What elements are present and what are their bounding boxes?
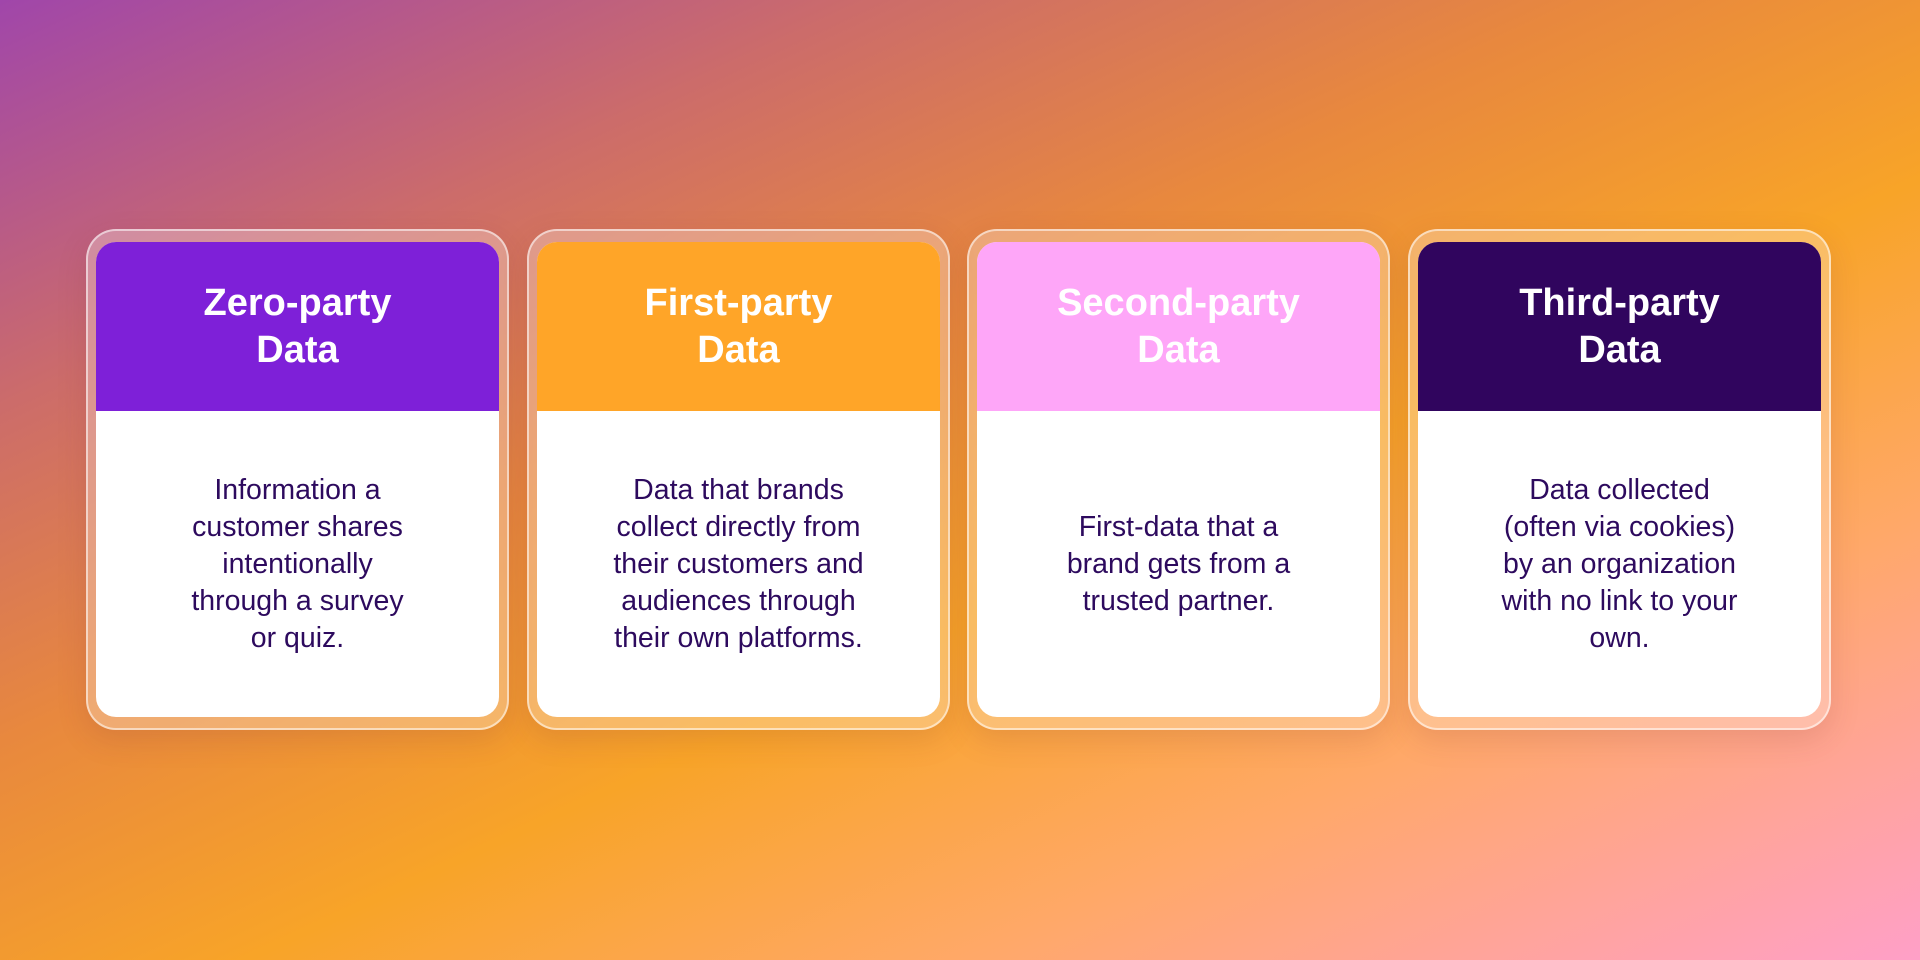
text: third-party description: Data collected bbox=[1529, 474, 1710, 506]
card: zero-party bbox=[86, 229, 509, 730]
text: first-party description: collect directly from bbox=[617, 510, 860, 542]
text: second-party description: trusted partner. bbox=[1083, 584, 1274, 616]
heading: first-party: First-party bbox=[645, 282, 832, 324]
text: zero-party description: or quiz. bbox=[251, 622, 344, 654]
text: first-party description bbox=[613, 474, 864, 654]
text: zero-party description: intentionally bbox=[222, 548, 373, 580]
heading: third-party: Third-party bbox=[1519, 282, 1720, 324]
heading: second-party: Data bbox=[1137, 328, 1220, 370]
heading: zero-party: Data bbox=[256, 328, 339, 370]
text: second-party description: brand gets from a bbox=[1067, 548, 1290, 580]
text: first-party description: their customers and bbox=[613, 548, 864, 580]
text: first-party description: audiences through bbox=[621, 584, 856, 616]
text: zero-party description bbox=[191, 474, 404, 654]
card: first-party bbox=[527, 229, 950, 730]
card: third-party bbox=[1408, 229, 1831, 730]
heading: first-party bbox=[537, 242, 940, 411]
text: third-party description bbox=[1501, 474, 1738, 654]
text: third-party description: (often via cookies) bbox=[1504, 510, 1735, 542]
heading: second-party: Second-party bbox=[1057, 282, 1300, 324]
text: first-party description: Data that brands bbox=[633, 474, 844, 506]
text: third-party description: with no link to your bbox=[1501, 584, 1738, 616]
card: second-party bbox=[967, 229, 1390, 730]
text: first-party description: their own platforms. bbox=[614, 622, 863, 654]
heading: zero-party: Zero-party bbox=[204, 282, 391, 324]
text: zero-party description: Information a bbox=[214, 474, 381, 506]
text: second-party description bbox=[1067, 510, 1290, 616]
text: second-party description: First-data that a bbox=[1079, 510, 1278, 542]
text: zero-party description: through a survey bbox=[191, 584, 404, 616]
heading: third-party: Data bbox=[1578, 328, 1661, 370]
heading: first-party: Data bbox=[697, 328, 780, 370]
heading: zero-party bbox=[96, 242, 499, 411]
heading: third-party bbox=[1418, 242, 1821, 411]
text: third-party description: own. bbox=[1589, 622, 1650, 654]
text: zero-party description: customer shares bbox=[192, 510, 403, 542]
text: third-party description: by an organization bbox=[1503, 548, 1736, 580]
heading: second-party bbox=[977, 242, 1380, 411]
